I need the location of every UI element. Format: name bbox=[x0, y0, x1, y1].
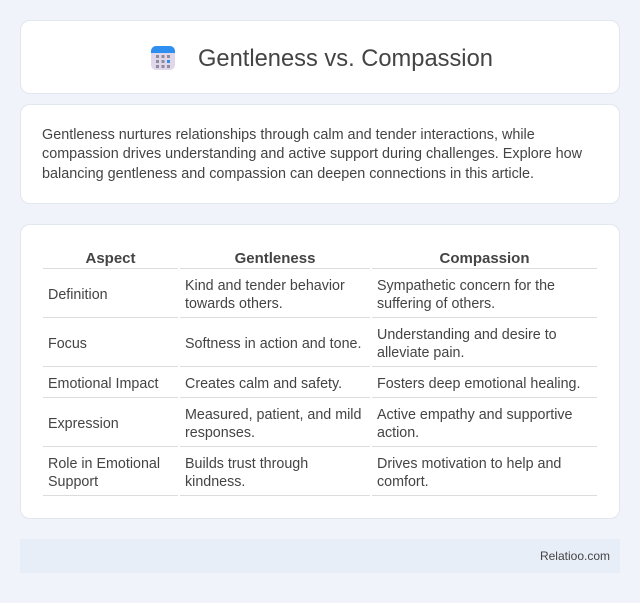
cell: Role compassion bbox=[377, 456, 561, 490]
table header: Compassion: Compassion bbox=[439, 250, 530, 267]
row: Emotional Impact: Emotional Impact bbox=[48, 376, 158, 392]
cell: Expression compassion: action. bbox=[377, 425, 419, 441]
icon: calendar bbox=[151, 46, 175, 70]
table header: Aspect: Aspect bbox=[85, 250, 136, 267]
cell: Expression gentleness: responses. bbox=[185, 425, 255, 441]
cell: Expression compassion: Active empathy and supportive bbox=[377, 407, 573, 423]
row: Role in Emotional Support: Support bbox=[48, 474, 98, 490]
title: Gentleness vs. Compassion bbox=[198, 46, 493, 72]
cell: Role gentleness bbox=[185, 456, 308, 490]
cell: Definition compassion bbox=[377, 278, 555, 312]
intro text: compassion drives understanding and active support during challenges. Explore how bbox=[42, 146, 582, 162]
cell: Role gentleness: Builds trust through bbox=[185, 456, 308, 472]
row: Role in Emotional Support bbox=[48, 456, 160, 490]
cell: Definition gentleness: towards others. bbox=[185, 296, 283, 312]
row: Focus: Focus bbox=[48, 336, 87, 352]
cell: Expression gentleness: Measured, patient, and mild bbox=[185, 407, 361, 423]
cell: Role gentleness: kindness. bbox=[185, 474, 245, 490]
cell: Emotional Impact gentleness: Creates calm and safety. bbox=[185, 376, 342, 392]
cell: Emotional Impact compassion: Fosters deep emotional healing. bbox=[377, 376, 580, 392]
cell: Definition gentleness: Kind and tender behavior bbox=[185, 278, 345, 294]
row: Definition: Definition bbox=[48, 287, 108, 303]
panel: title card bbox=[20, 20, 620, 94]
row: Expression: Expression bbox=[48, 416, 119, 432]
cell: Definition gentleness bbox=[185, 278, 345, 312]
intro text bbox=[42, 126, 582, 182]
intro text: balancing gentleness and compassion can deepen connections in this article. bbox=[42, 166, 534, 182]
cell: Expression gentleness bbox=[185, 407, 361, 441]
cell: Focus gentleness: Softness in action and tone. bbox=[185, 336, 361, 352]
intro text: Gentleness nurtures relationships through calm and tender interactions, while bbox=[42, 126, 535, 142]
footer credit: Relatioo.com bbox=[540, 549, 610, 563]
cell: Definition compassion: suffering of others. bbox=[377, 296, 495, 312]
panel: introduction bbox=[20, 104, 620, 204]
cell: Role compassion: comfort. bbox=[377, 474, 429, 490]
panel: comparison table bbox=[20, 224, 620, 519]
cell: Focus compassion bbox=[377, 327, 557, 361]
cell: Role compassion: Drives motivation to help and bbox=[377, 456, 561, 472]
table header: Gentleness: Gentleness bbox=[235, 250, 315, 267]
cell: Definition compassion: Sympathetic concern for the bbox=[377, 278, 555, 294]
footer bar bbox=[20, 539, 620, 573]
cell: Focus compassion: alleviate pain. bbox=[377, 345, 464, 361]
cell: Expression compassion bbox=[377, 407, 573, 441]
row: Role in Emotional Support: Role in Emotional bbox=[48, 456, 160, 472]
cell: Focus compassion: Understanding and desire to bbox=[377, 327, 557, 343]
